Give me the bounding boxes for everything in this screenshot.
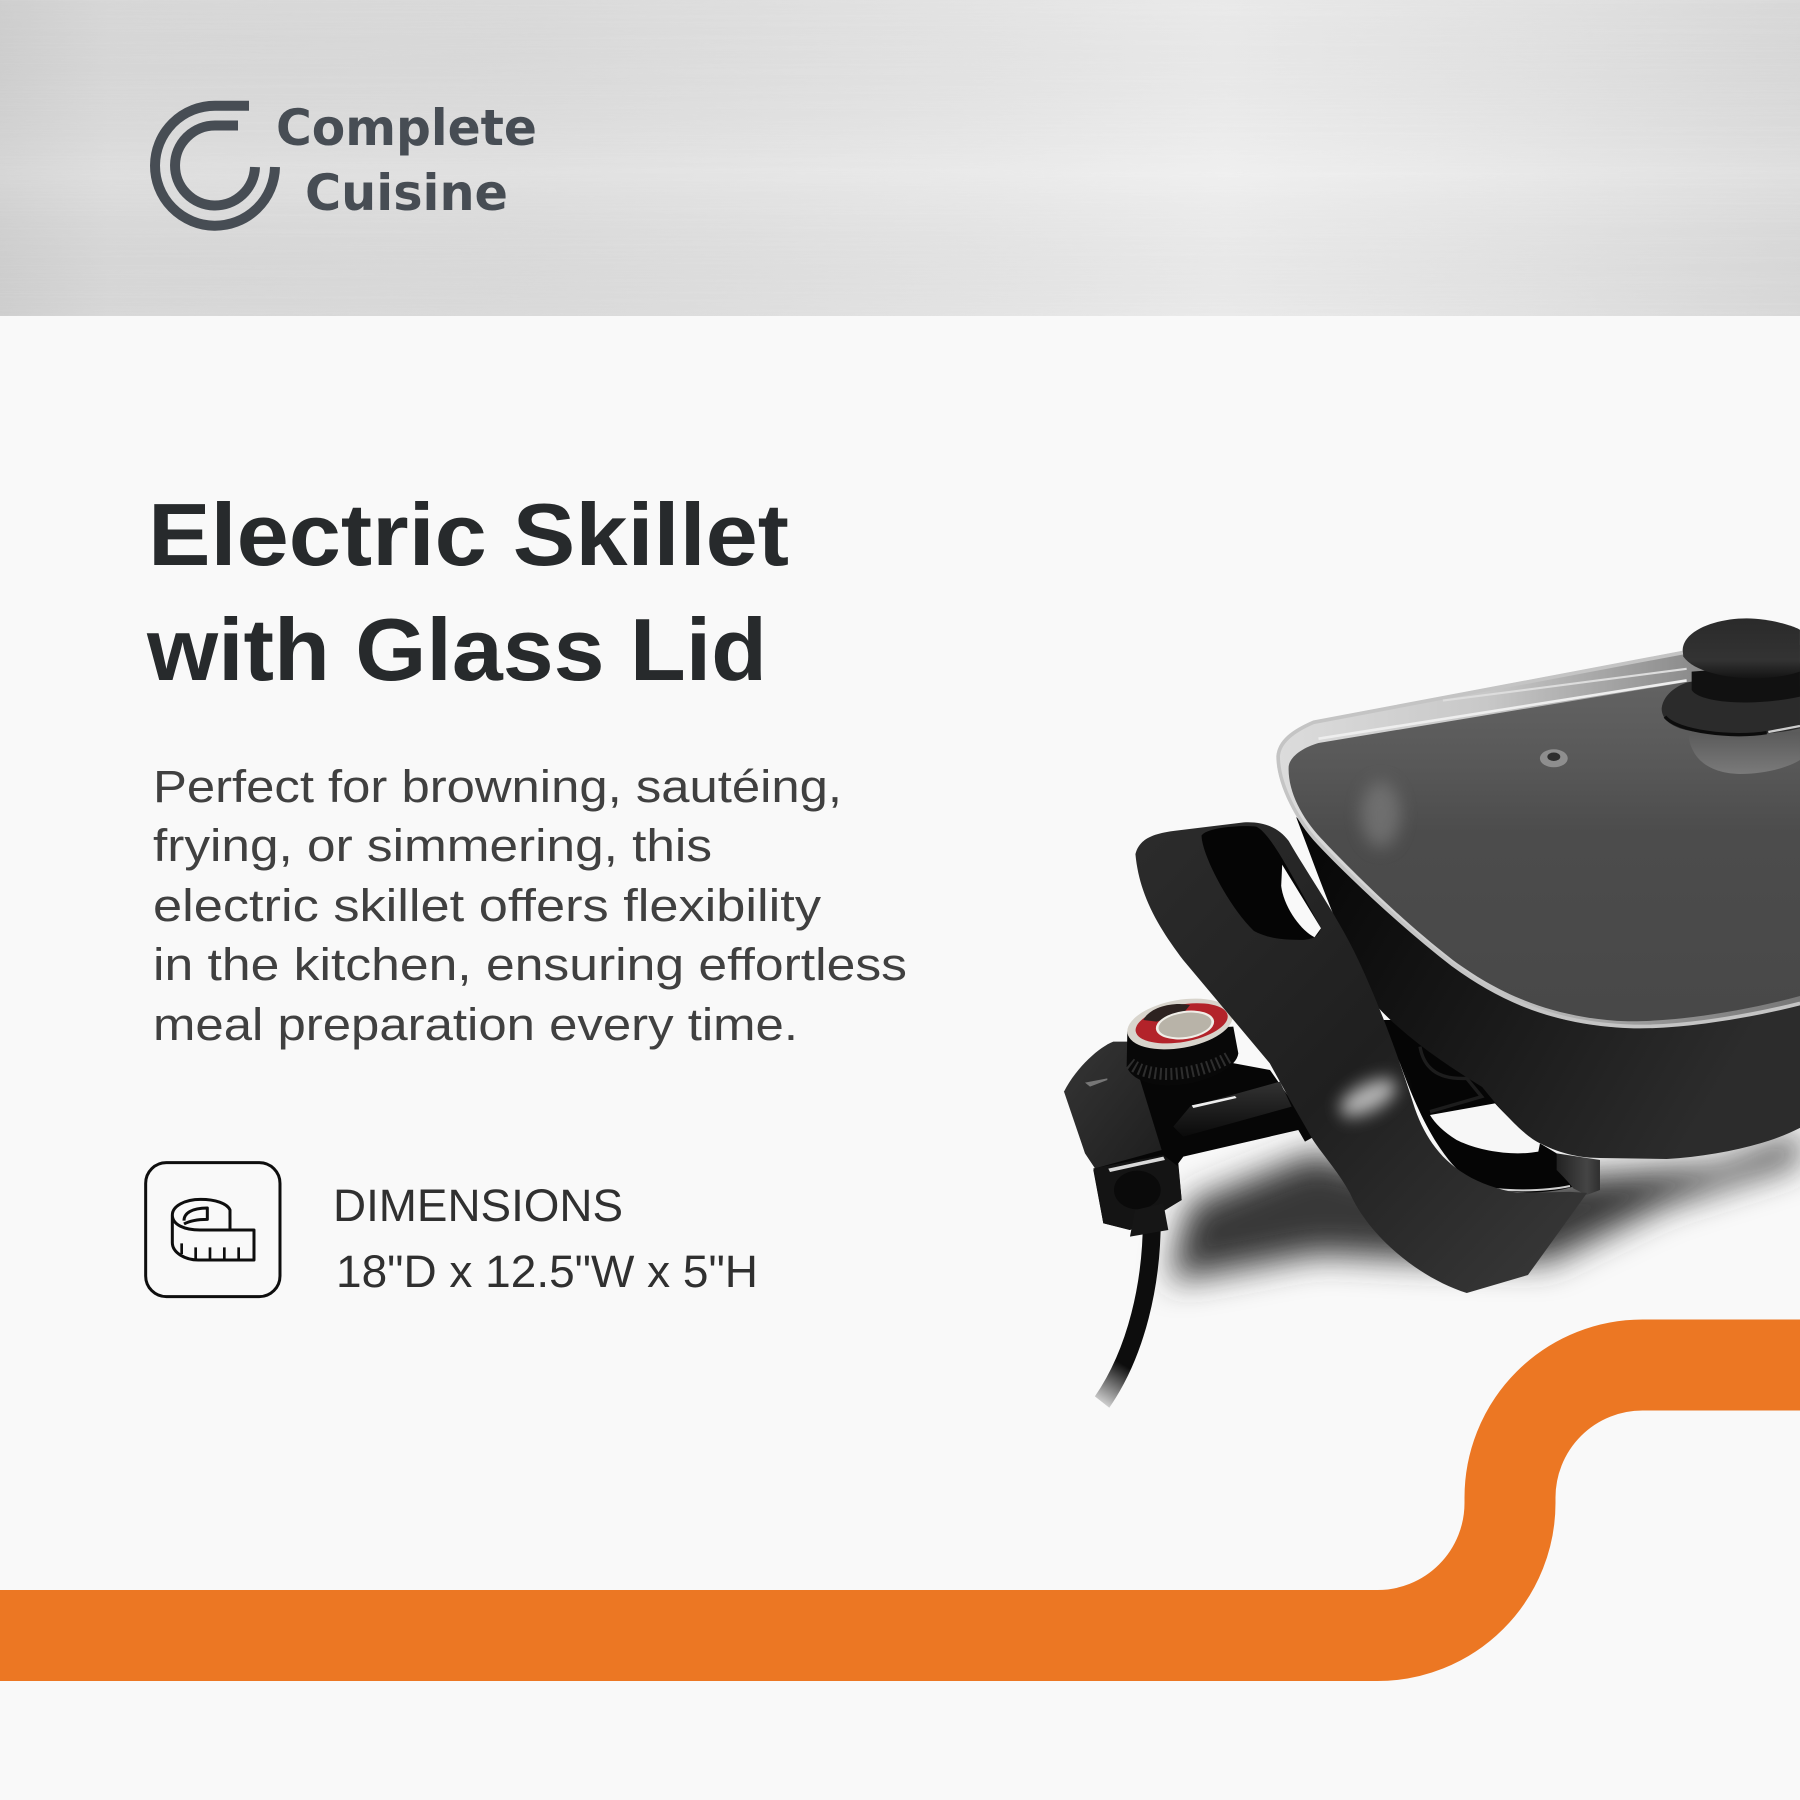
power cord <box>1102 1219 1152 1402</box>
pan and glass lid <box>1276 645 1800 1159</box>
title <box>146 485 789 699</box>
lid interior <box>1289 679 1800 1021</box>
plug <box>1093 1155 1182 1230</box>
handle body <box>1135 822 1587 1293</box>
black inner handle curve and pan underside <box>1380 1020 1573 1192</box>
title: Electric Skillet <box>148 485 789 584</box>
see-through gap in handle <box>1281 865 1321 937</box>
knob cap <box>1683 618 1800 678</box>
description text block: electric skillet offers flexibility <box>153 880 822 931</box>
dimensions text: DIMENSIONS <box>333 1180 623 1231</box>
header: brushed metal band <box>0 0 1800 316</box>
pan foot <box>1557 1153 1600 1195</box>
logo: Complete Cuisine <box>155 99 537 226</box>
knob flange <box>1662 682 1800 735</box>
description text block: Perfect for browning, sautéing, <box>153 761 842 812</box>
icon: measuring tape in rounded box <box>146 1163 280 1297</box>
description text block: in the kitchen, ensuring effortless <box>153 939 907 990</box>
dimensions text <box>333 1180 758 1297</box>
lid sheen <box>1361 782 1401 847</box>
side handle <box>1135 822 1587 1293</box>
title: with Glass Lid <box>146 600 767 699</box>
description text block: frying, or simmering, this <box>153 820 712 871</box>
lid knob <box>1662 618 1800 774</box>
gap and foot under handle <box>1380 1020 1573 1192</box>
orange curved ribbon <box>0 1365 1800 1636</box>
dimensions text: 18"D x 12.5"W x 5"H <box>336 1246 758 1297</box>
white gap <box>1430 1103 1540 1153</box>
logo icon: concentric C rings <box>155 106 275 226</box>
probe housing <box>1064 1042 1162 1168</box>
cast shadow <box>1169 1135 1800 1280</box>
logo wordmark <box>276 99 537 222</box>
knob reflection in glass <box>1688 732 1800 774</box>
connector arm <box>1093 1043 1320 1230</box>
temperature probe and dial <box>1064 991 1320 1237</box>
pan body <box>1296 817 1800 1159</box>
description text block: meal preparation every time. <box>153 999 798 1050</box>
logo wordmark: Complete <box>276 99 537 157</box>
product photo: electric skillet <box>1064 618 1800 1402</box>
handle grip hole <box>1202 826 1321 940</box>
logo wordmark: Cuisine <box>305 164 508 222</box>
knob neck <box>1692 663 1800 702</box>
dial <box>1123 991 1238 1085</box>
description text block <box>153 761 907 1050</box>
silver highlight <box>1480 1186 1570 1190</box>
lid vent <box>1540 749 1568 767</box>
bracket detail <box>1420 1047 1482 1112</box>
handle highlight <box>1335 1071 1402 1124</box>
glass lid <box>1276 645 1800 1028</box>
lid rim <box>1278 652 1800 1027</box>
